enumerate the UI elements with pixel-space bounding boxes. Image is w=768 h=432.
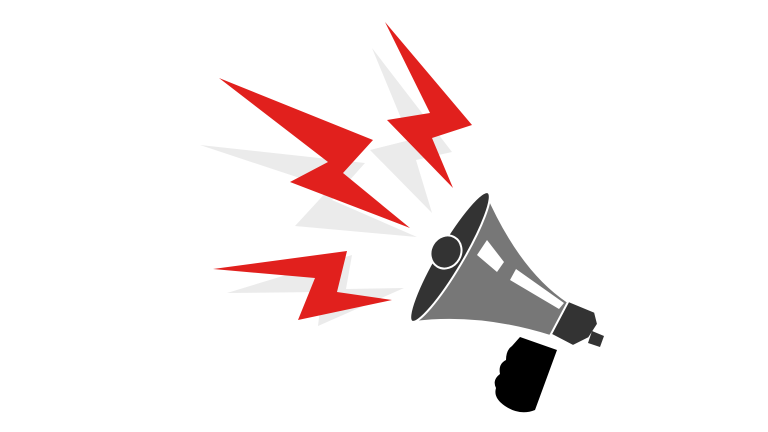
rim	[401, 186, 499, 328]
megaphone	[401, 186, 604, 412]
collar	[550, 300, 598, 346]
knob	[588, 331, 604, 347]
stripes	[477, 240, 504, 272]
handle	[495, 337, 557, 412]
bolt: top right	[385, 22, 472, 188]
cone	[414, 192, 568, 336]
bolt: bottom	[213, 251, 392, 320]
badge	[425, 230, 467, 274]
bolt: large left	[219, 78, 410, 228]
bolt shadows	[200, 48, 452, 326]
